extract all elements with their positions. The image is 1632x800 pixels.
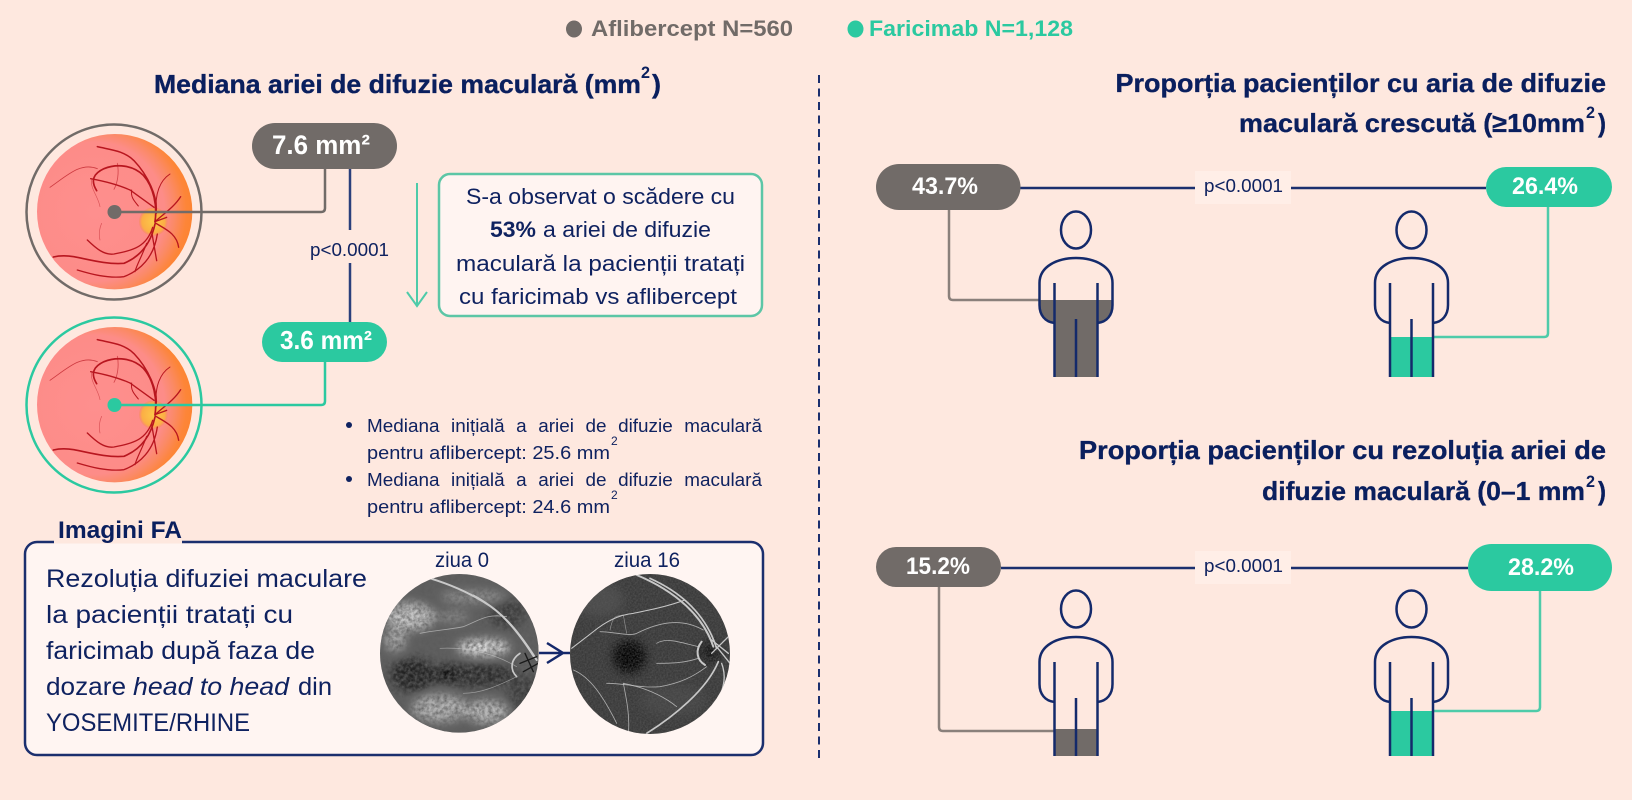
heading: proportion resolution: 2 xyxy=(1586,472,1595,491)
heading: proportion increased area xyxy=(1116,68,1606,138)
person aflibercept 43.7% xyxy=(1039,212,1113,377)
panel frame xyxy=(25,542,763,755)
bullet 2 xyxy=(346,470,763,517)
link with p-value xyxy=(1020,171,1486,204)
panel text: head to head xyxy=(133,673,290,701)
pill: 3.6 mm2 xyxy=(262,322,387,362)
heading: proportion resolution xyxy=(1079,435,1606,506)
FA image day 16 xyxy=(570,574,730,734)
bullet 1 xyxy=(346,416,763,463)
connector faricimab xyxy=(1433,207,1548,337)
heading: proportion increased area: 2 xyxy=(1586,103,1595,122)
arrow: decrease xyxy=(407,183,427,306)
pill: 7.6 mm2: 7.6 mm² xyxy=(272,130,370,160)
pill: 15.2%: 15.2% xyxy=(906,553,970,580)
panel text: din xyxy=(298,673,332,701)
heading: proportion resolution: Proporția pacienților cu rezoluția ariei de xyxy=(1079,435,1606,465)
heading: proportion resolution: difuzie maculară (0–1 mm xyxy=(1262,476,1585,506)
link with p-value xyxy=(1001,551,1468,584)
connector faricimab xyxy=(1433,591,1540,711)
callout: 53% decrease: cu faricimab vs aflibercept xyxy=(459,284,738,309)
pill: 28.2% xyxy=(1468,544,1612,591)
pill: 26.4% xyxy=(1486,167,1612,207)
pill: 43.7%: 43.7% xyxy=(912,173,978,200)
heading: proportion resolution: ) xyxy=(1598,476,1606,506)
heading: mediana ariei de difuzie: ) xyxy=(652,69,661,99)
pill: 26.4%: 26.4% xyxy=(1512,173,1578,200)
chart: increased area comparison xyxy=(876,164,1612,377)
panel text: YOSEMITE/RHINE xyxy=(46,709,250,737)
panel: FA images xyxy=(25,517,763,755)
legend: aflibercept: Aflibercept N=560 xyxy=(591,16,793,41)
connector aflibercept xyxy=(949,210,1040,300)
bullet 1: pentru aflibercept: 25.6 mm xyxy=(367,443,610,463)
person faricimab 28.2% xyxy=(1374,590,1448,756)
bullet 2: 2 xyxy=(611,488,618,502)
callout: 53% decrease: a ariei de difuzie xyxy=(543,217,711,242)
legend: faricimab: Faricimab N=1,128 xyxy=(869,16,1073,41)
heading: mediana ariei de difuzie: 2 xyxy=(641,63,650,82)
p-value link: p<0.0001 xyxy=(310,240,389,260)
retina aflibercept xyxy=(26,124,202,300)
callout: 53% decrease xyxy=(439,174,762,316)
text block: baseline medians xyxy=(346,416,763,517)
label: ziua 16: ziua 16 xyxy=(614,549,680,572)
callout: 53% decrease: S-a observat o scădere cu xyxy=(466,184,735,209)
FA image day 0 xyxy=(380,574,540,733)
heading: mediana ariei de difuzie: Mediana ariei de difuzie maculară (mm xyxy=(154,69,641,99)
heading: proportion increased area: Proporția pacienților cu aria de difuzie xyxy=(1116,68,1606,98)
legend xyxy=(566,16,1073,41)
panel text: faricimab după faza de xyxy=(46,637,315,665)
divider xyxy=(818,75,820,760)
bullet 1: 2 xyxy=(611,434,618,448)
callout: 53% decrease: 53% xyxy=(490,217,536,242)
label: ziua 0: ziua 0 xyxy=(435,549,489,572)
connector aflibercept xyxy=(108,169,325,219)
panel text xyxy=(46,565,367,737)
bullet 2: pentru aflibercept: 24.6 mm xyxy=(367,497,610,517)
pill: 3.6 mm2: 3.6 mm² xyxy=(280,325,372,355)
connector aflibercept xyxy=(939,587,1054,731)
chart: resolution comparison xyxy=(876,544,1612,756)
panel text: la pacienții tratați cu xyxy=(46,601,293,629)
panel text: dozare xyxy=(46,673,126,701)
retina faricimab xyxy=(26,318,202,492)
bullet 2: Mediana inițială a ariei de difuzie maculară xyxy=(367,470,763,490)
pill: 28.2%: 28.2% xyxy=(1508,554,1574,581)
heading: proportion increased area: ) xyxy=(1598,108,1606,138)
link with p-value: p<0.0001 xyxy=(1204,176,1283,196)
panel title: Imagini FA: Imagini FA xyxy=(58,517,182,544)
person faricimab 26.4% xyxy=(1374,212,1448,377)
arrow: day 0 to day 16 xyxy=(539,643,570,663)
pill: 43.7% xyxy=(876,164,1020,210)
link with p-value: p<0.0001 xyxy=(1204,556,1283,576)
person aflibercept 15.2% xyxy=(1039,590,1113,756)
panel text: Rezoluția difuziei maculare xyxy=(46,565,367,593)
callout: 53% decrease: maculară la pacienții tratați xyxy=(456,251,745,276)
bullet 1: Mediana inițială a ariei de difuzie maculară xyxy=(367,416,763,436)
pill: 7.6 mm2 xyxy=(252,123,397,169)
heading: proportion increased area: maculară crescută (≥10mm xyxy=(1239,108,1585,138)
panel: retina comparison xyxy=(26,123,397,492)
pill: 15.2% xyxy=(876,547,1001,587)
connector faricimab xyxy=(108,362,325,412)
